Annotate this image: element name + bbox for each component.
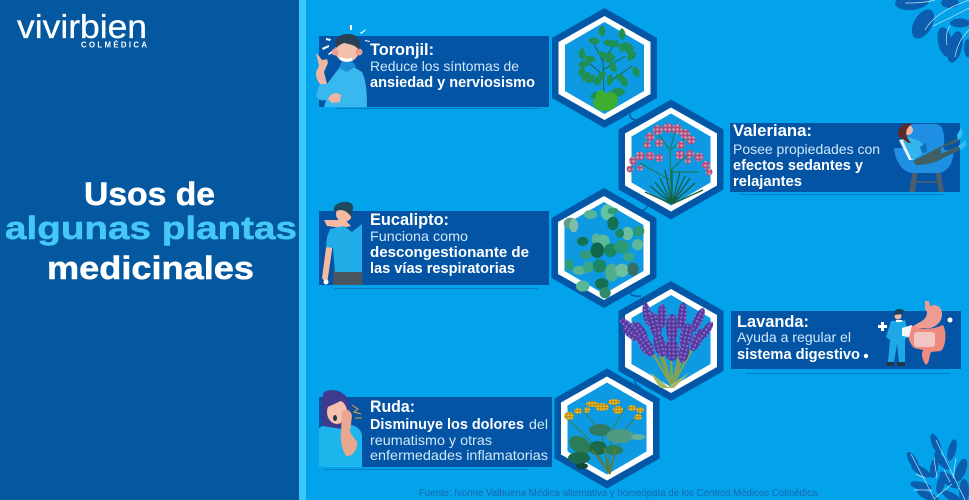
- panel: Lavanda: Lavanda:: [737, 313, 809, 331]
- hexagon: Toronjil plant: [552, 8, 657, 128]
- left panel: [0, 0, 299, 500]
- illustration: woman with toothache: [319, 390, 362, 467]
- panel: Toronjil: [316, 25, 549, 109]
- connectors between hexagons: [630, 114, 648, 388]
- panel: Eucalipto: descongestionante de: [370, 245, 529, 261]
- panel: Lavanda: Ayuda a regular el: [737, 329, 851, 345]
- logo: vivirbien Colmédica: vivirbien: [17, 8, 147, 45]
- illustration: man coughing: [322, 202, 363, 285]
- hexagon: Ruda plant: [554, 368, 660, 488]
- panel: Toronjil: ansiedad y nerviosismo: [370, 75, 535, 91]
- panel: Ruda: enfermedades inflamatorias: [370, 447, 548, 463]
- decoration: top right leaves: [894, 0, 969, 64]
- hexagon: Lavanda plant: [618, 281, 724, 401]
- title: medicinales: [47, 250, 254, 286]
- title: algunas plantas: [5, 210, 297, 246]
- icon: doctor: [886, 309, 912, 366]
- panel: Valeriana: relajantes: [733, 174, 802, 190]
- panel: Toronjil: Reduce los síntomas de: [370, 58, 519, 74]
- panel: Valeriana: Valeriana:: [733, 122, 812, 140]
- panel: Lavanda: [731, 301, 961, 374]
- illustration: doctor and digestive system: [878, 301, 952, 366]
- hexagon: Eucalipto plant: [552, 188, 656, 308]
- hexagon: Valeriana plant: [618, 100, 724, 220]
- panel: Eucalipto: Eucalipto:: [370, 211, 449, 229]
- panel: Toronjil: Toronjil:: [370, 41, 434, 59]
- panel: Lavanda: sistema digestivo: [737, 347, 860, 363]
- panel: Ruda: reumatismo y otras: [370, 432, 492, 448]
- icon: sweat drops: [322, 25, 370, 55]
- icon: plus: [878, 322, 887, 331]
- panel: Valeriana: Posee propiedades con: [733, 141, 880, 157]
- source note: Fuente: Ivonne Valbuena Médica alternativa y homeópata de los Centros Médicos Colmédica.: [419, 487, 820, 499]
- illustration: anxious man: [316, 25, 370, 107]
- accent stripe: [299, 0, 306, 500]
- panel: Ruda: del: [529, 416, 548, 432]
- logo: vivirbien Colmédica: COLMÉDICA: [81, 40, 147, 50]
- title: Usos de: [84, 176, 215, 212]
- panel: Eucalipto: [319, 202, 549, 289]
- illustration: woman relaxing in chair: [894, 123, 966, 192]
- panel: Ruda: Ruda:: [370, 398, 415, 416]
- panel: Eucalipto: Funciona como: [370, 228, 468, 244]
- panel: Eucalipto: las vías respiratorias: [370, 261, 515, 277]
- decoration: bottom right leaves: [905, 432, 969, 500]
- panel: Ruda: Disminuye los dolores: [370, 417, 524, 433]
- panel: Valeriana: efectos sedantes y: [733, 158, 863, 174]
- panel: Valeriana: [730, 122, 966, 195]
- icon: intestines and stomach: [908, 301, 945, 365]
- title: [5, 176, 297, 286]
- panel: Ruda: [319, 390, 552, 470]
